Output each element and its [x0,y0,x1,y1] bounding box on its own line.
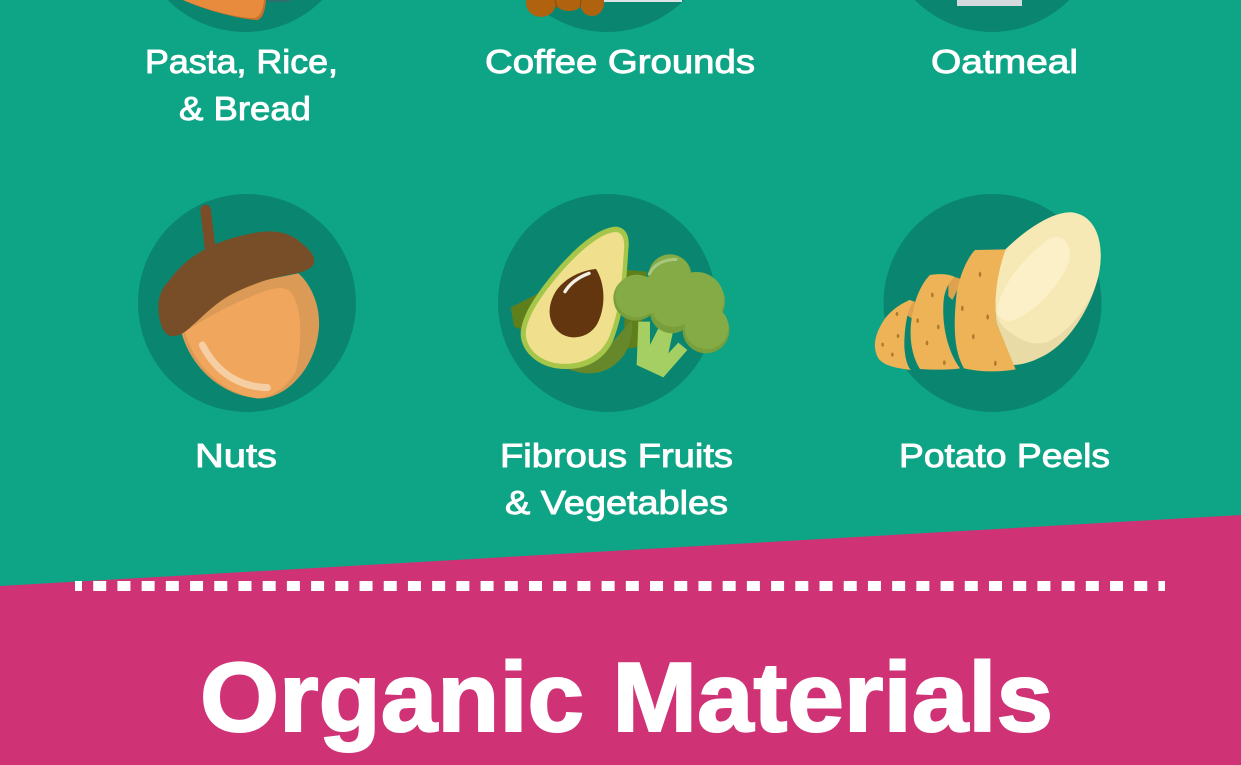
label: pasta, rice and bread [145,43,338,127]
icon: oatmeal (cropped) [883,0,1101,32]
icon: avocado and broccoli [498,194,729,412]
icon: potato peels [875,194,1102,412]
label: nuts: Nuts [195,437,277,474]
label: pasta, rice and bread: & Bread [179,90,311,127]
label: potato peels: Potato Peels [899,437,1110,474]
label: coffee grounds: Coffee Grounds [485,43,755,80]
icon: nuts acorn [138,194,356,412]
label: fibrous fruits and vegetables: Fibrous Fruits [500,437,733,474]
label: pasta, rice and bread: Pasta, Rice, [145,43,338,80]
dotted divider line [75,581,1165,591]
label: fibrous fruits and vegetables [500,437,733,521]
icon: pasta, rice and bread (cropped) [136,0,354,32]
panel: pink organic materials banner [0,515,1241,765]
title: Organic Materials [200,642,1053,752]
label: oatmeal: Oatmeal [931,43,1078,80]
icon: coffee grounds (cropped) [498,0,716,32]
label: fibrous fruits and vegetables: & Vegetables [505,484,728,521]
